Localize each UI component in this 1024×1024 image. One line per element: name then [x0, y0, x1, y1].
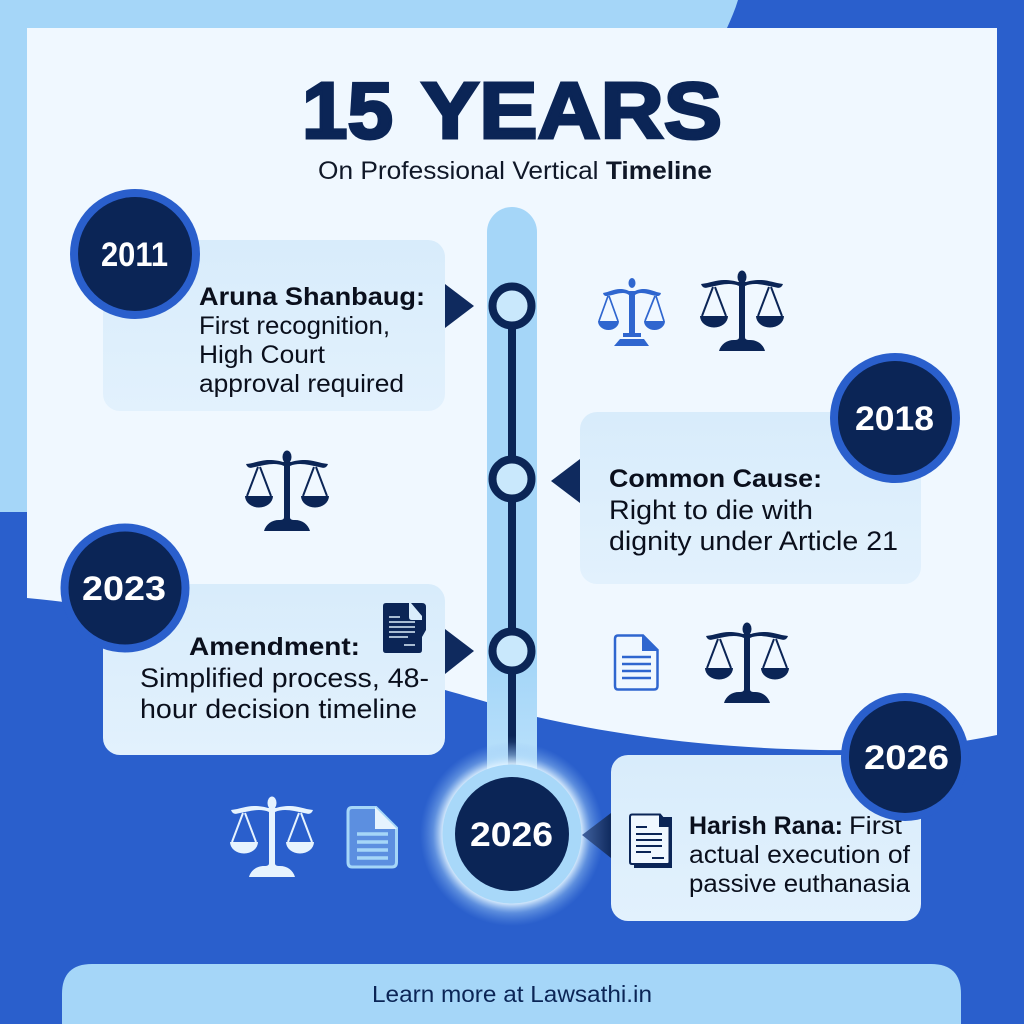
- arrow: 2018: [551, 459, 580, 503]
- year badge 2023: [60, 524, 190, 652]
- text: Harish Rana: First: [849, 812, 902, 840]
- panel: 2023 Amendment: [103, 584, 445, 755]
- year badge 2011: [70, 189, 200, 319]
- text: Harish Rana: actual execution of: [689, 841, 910, 869]
- central 2026 node: 2026: [470, 816, 553, 854]
- year badge 2011: 2011: [101, 236, 168, 274]
- text: Common Cause: Right to die with: [609, 495, 813, 525]
- panel: 2018 Common Cause: [580, 412, 921, 584]
- text: Common Cause: dignity under Article 21: [609, 526, 898, 556]
- icon: navy scales lower right: [705, 622, 789, 703]
- icon: navy document: [383, 603, 426, 653]
- footer bar: [62, 964, 961, 1024]
- year badge 2018: [830, 353, 960, 483]
- text: Common Cause: Common Cause:: [609, 465, 822, 493]
- timeline node 2011: [492, 286, 532, 326]
- text: Harish Rana: passive euthanasia: [689, 870, 910, 898]
- icon: light document: [348, 807, 397, 867]
- icon: navy scales top right: [700, 270, 784, 351]
- subtitle: On Professional Vertical Timeline: [318, 157, 712, 185]
- panel: 2011 Aruna Shanbaug: [103, 240, 445, 411]
- timeline rail: [487, 207, 537, 817]
- text: Aruna Shanbaug: approval required: [199, 370, 404, 398]
- timeline node 2018: [492, 460, 532, 498]
- icon: navy outline document: [630, 814, 672, 868]
- text: Harish Rana: Harish Rana:: [689, 812, 843, 840]
- year badge 2023: 2023: [82, 570, 166, 608]
- text: Aruna Shanbaug: High Court: [199, 341, 325, 369]
- timeline node 2023: [492, 632, 532, 670]
- central 2026 node: [420, 742, 604, 926]
- text: Amendment: Amendment:: [189, 633, 360, 661]
- text: Amendment: hour decision timeline: [140, 694, 417, 724]
- year badge 2026: 2026: [864, 739, 949, 777]
- arrow: 2011: [445, 284, 474, 328]
- icon: blue scales: [598, 278, 665, 346]
- text: Amendment: Simplified process, 48-: [140, 663, 429, 693]
- main white panel: [27, 28, 997, 750]
- panel: 2026 Harish Rana: [611, 755, 921, 921]
- text: Aruna Shanbaug: Aruna Shanbaug:: [199, 283, 425, 311]
- year badge 2026: [841, 693, 969, 821]
- text: Aruna Shanbaug: First recognition,: [199, 312, 390, 340]
- arrow: 2026: [582, 813, 611, 858]
- icon: white scales: [230, 796, 314, 877]
- icon: blue document: [615, 635, 658, 690]
- year badge 2018: 2018: [855, 400, 934, 438]
- footer text: Learn more at Lawsathi.in: [372, 981, 652, 1007]
- title: 15: [302, 66, 393, 155]
- arrow: 2023: [445, 629, 474, 674]
- icon: navy scales middle left: [245, 450, 329, 531]
- title: YEARS: [421, 66, 722, 155]
